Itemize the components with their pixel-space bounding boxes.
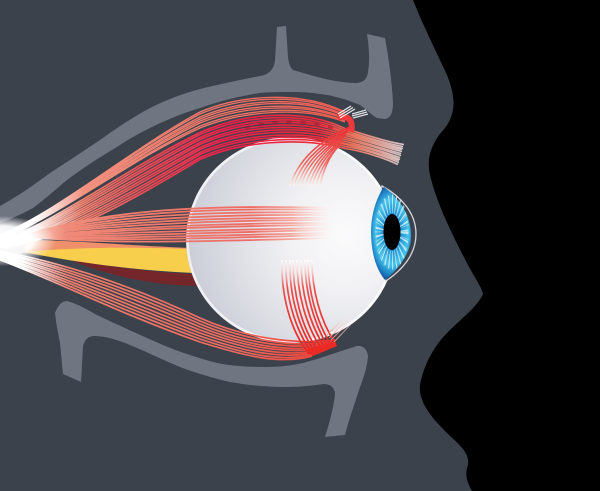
dark red muscle behind optic nerve — [70, 260, 198, 286]
optic nerve — [23, 248, 194, 273]
fading fibres near insertion — [326, 316, 353, 342]
lower orbital bone — [55, 301, 368, 437]
salmon band above optic nerve — [25, 240, 190, 252]
superior oblique insertion fibres — [290, 127, 350, 186]
inferior rectus muscle — [0, 250, 335, 360]
dark shading marks on superior band — [245, 122, 340, 130]
superior oblique upper band — [0, 97, 345, 240]
upper orbital bone — [0, 26, 393, 223]
inferior oblique muscle — [282, 260, 335, 354]
medial rectus muscle — [30, 207, 330, 242]
eyeball — [186, 137, 396, 343]
face silhouette — [413, 0, 600, 491]
nerve origin glow — [0, 216, 56, 266]
iris — [371, 187, 411, 280]
cornea — [372, 186, 416, 281]
iris rays — [378, 202, 406, 262]
inferior oblique insertion — [305, 341, 337, 356]
superior rectus and levator band — [0, 115, 404, 247]
pupil — [384, 214, 400, 250]
trochlea pulley — [338, 106, 368, 132]
